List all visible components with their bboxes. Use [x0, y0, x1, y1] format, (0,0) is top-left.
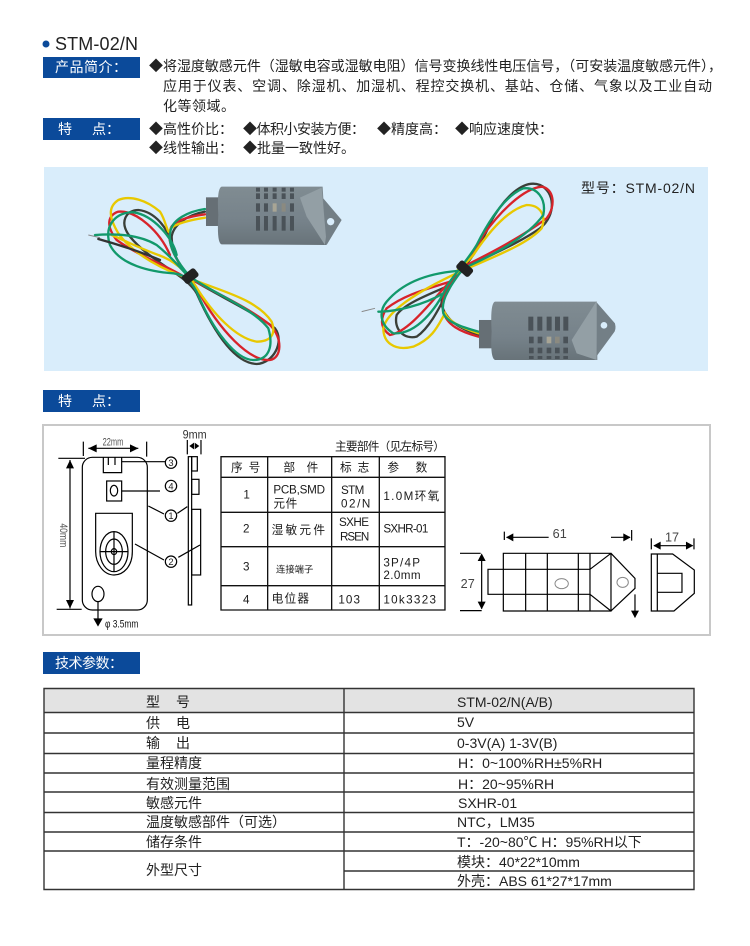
model label: 型号：STM-02/N [581, 180, 695, 196]
table row: storage [146, 834, 642, 850]
table: main parts: 序号 [231, 460, 260, 474]
table: main parts: 103 [338, 593, 360, 606]
heading: features 2: 特 [58, 393, 72, 409]
table row: power supply: 5V [457, 714, 475, 730]
diagram: circuit board: φ 3.5mm [105, 618, 138, 630]
table row: model: 号 [176, 694, 190, 710]
diagram: circuit board: 9mm [183, 427, 207, 441]
text block: product intro: ◆将湿度敏感元件（湿敏电容或湿敏电阻）信号变换线性电压信号，（可安装温度敏感元件）， [149, 58, 722, 74]
heading: features: 点： [92, 121, 120, 137]
text block: features: ◆体积小安装方便： [243, 121, 365, 137]
diagram: circuit board: 4 [168, 481, 174, 491]
table row: sensing element [146, 795, 517, 811]
table: main parts: SXHE [339, 516, 369, 529]
diagram: enclosure: 27 [461, 577, 475, 591]
diagram: circuit board: 2 [168, 557, 174, 567]
table row: storage: T：-20~80℃ H：95%RH以下 [457, 834, 642, 850]
diagram: circuit board: 1 [168, 511, 174, 521]
table row: temperature element: 温度敏感部件（可选） [146, 814, 286, 830]
table row: temperature element: NTC，LM35 [457, 814, 535, 830]
table: technical parameters [44, 688, 694, 890]
table row: model: STM-02/N(A/B) [457, 694, 553, 710]
table row: range accuracy [146, 755, 602, 771]
table row: effective range: H：20~95%RH [458, 776, 554, 792]
table: main parts: 标志 [340, 461, 370, 474]
table row: sensing element: 敏感元件 [146, 795, 202, 811]
table: main parts: 部件 [283, 460, 319, 474]
table row: sensing element: SXHR-01 [458, 795, 517, 811]
table row: storage: 储存条件 [146, 834, 202, 850]
table row: output [146, 735, 557, 751]
heading: features 2: 点： [92, 393, 120, 409]
table row: dimensions: 外壳：ABS 61*27*17mm [457, 873, 612, 889]
table: main parts: 参数 [387, 460, 428, 474]
table: main parts: 湿敏元件 [272, 523, 325, 537]
text block: product intro: 应用于仪表、空调、除湿机、加湿机、程控交换机、基站、仓储、气象以及工业自动 [163, 78, 712, 94]
table caption: 主要部件（见左标号） [335, 440, 445, 454]
heading: features: 特 [58, 121, 72, 137]
table row: output: 0-3V(A) 1-3V(B) [457, 735, 557, 751]
title: STM-02/N [55, 34, 138, 54]
text block: features: ◆高性价比： [149, 121, 233, 137]
table: main parts: 02/N [341, 497, 370, 510]
diagram: circuit board: 40mm [57, 523, 69, 547]
table: main parts: 连接端子 [276, 564, 313, 575]
table: main parts: STM [341, 484, 364, 497]
table row: range accuracy: 量程精度 [146, 755, 202, 771]
heading: technical parameters: 技术参数： [55, 655, 123, 671]
table: main parts: SXHR-01 [383, 523, 428, 536]
table: main parts: 电位器 [272, 592, 309, 606]
table row: range accuracy: H：0~100%RH±5%RH [458, 755, 602, 771]
text block: features [149, 121, 553, 156]
table row: dimensions: 外型尺寸 [146, 862, 202, 878]
table: main parts: 3 [243, 561, 249, 574]
diagram: enclosure: 61 [553, 527, 567, 541]
sensor photo: right [362, 184, 616, 360]
table row: dimensions: 模块：40*22*10mm [457, 854, 580, 870]
sensor photo: left [88, 187, 342, 364]
heading: features [43, 118, 140, 140]
heading: technical parameters [43, 652, 140, 674]
text block: product intro: 化等领域。 [163, 98, 235, 114]
diagram: enclosure [460, 527, 694, 618]
text block: features: ◆响应速度快： [455, 121, 553, 137]
diagram: enclosure: 17 [665, 530, 679, 544]
text block: features: ◆线性输出： [149, 140, 233, 156]
table: main parts: 4 [243, 593, 250, 606]
table: main parts: 元件 [273, 496, 298, 510]
table: main parts: 2 [243, 522, 249, 535]
table: main parts: 2.0mm [383, 569, 421, 582]
table row: power supply [146, 714, 475, 731]
table: main parts: 3P/4P [383, 557, 420, 570]
table row: output: 出 [176, 735, 190, 751]
table: main parts: 1 [243, 488, 250, 501]
table row: power supply: 电 [176, 715, 190, 731]
table: main parts [221, 440, 445, 610]
table: main parts: RSEN [340, 531, 369, 544]
heading: product intro [43, 57, 140, 78]
table row: model [146, 694, 553, 710]
diagram: circuit board: 3 [168, 458, 174, 468]
table row: power supply: 供 [146, 715, 160, 731]
table row: effective range [146, 776, 554, 792]
panel: product photo [44, 167, 708, 371]
table row: effective range: 有效测量范围 [146, 776, 230, 792]
panel: dimension drawings [43, 425, 710, 635]
table row: dimensions [146, 854, 612, 889]
text block: features: ◆精度高： [377, 121, 447, 137]
text block: product intro [149, 58, 722, 114]
text block: features: ◆批量一致性好。 [243, 140, 355, 156]
heading: features 2 [43, 390, 140, 412]
diagram: circuit board [57, 427, 207, 630]
diagram: circuit board: 22mm [103, 436, 123, 448]
table: main parts: 10k3323 [383, 593, 436, 606]
table: main parts: 1.0M环氧 [383, 489, 440, 503]
table row: temperature element [146, 814, 535, 830]
table row: output: 输 [146, 735, 160, 751]
table row: model: 型 [146, 694, 160, 710]
table: main parts: PCB,SMD [273, 483, 325, 496]
heading: product intro: 产品简介： [55, 59, 127, 75]
